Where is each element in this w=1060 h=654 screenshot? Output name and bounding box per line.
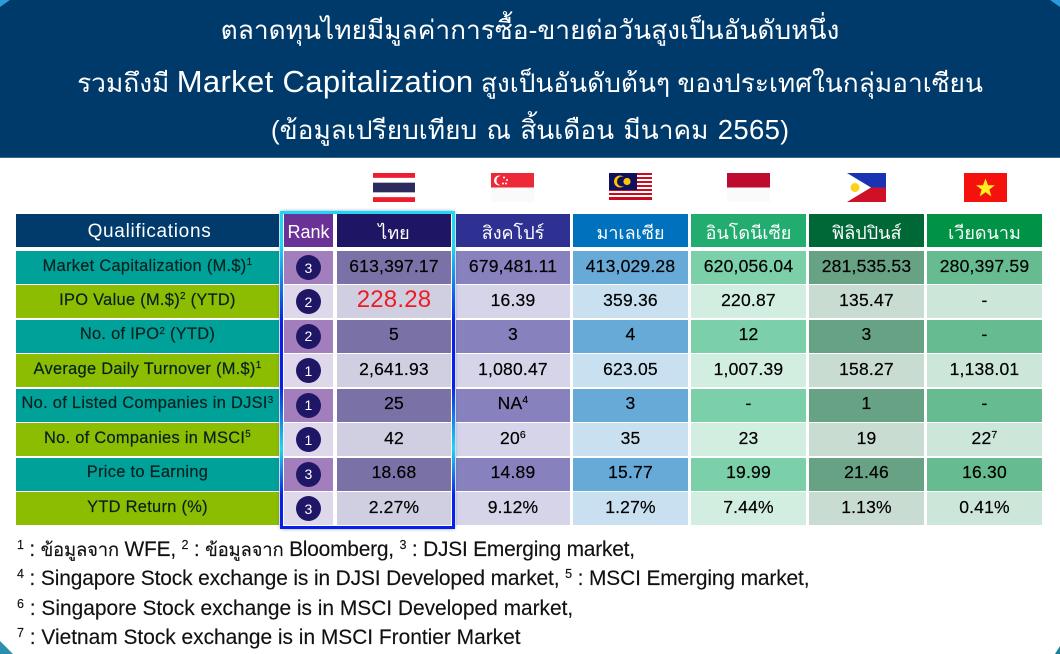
- row: No. of IPO: 2: [304, 328, 312, 344]
- row: No. of IPO: 3: [862, 324, 871, 344]
- row: IPO Value: 228.28: [357, 286, 431, 313]
- row: No. of Companies in MSCI: No. of Companies in MSCI5: [44, 428, 251, 446]
- header: Thailand: ไทย: [378, 222, 410, 242]
- row: Price to Earning: 14.89: [491, 462, 535, 482]
- row: Market Capitalization: 620,056.04: [704, 256, 793, 276]
- row: No. of Listed Companies in DJSI: NA4: [498, 393, 528, 413]
- header: Vietnam: เวียดนาม: [948, 222, 1021, 242]
- row: YTD Return: YTD Return (%): [87, 498, 208, 516]
- row: YTD Return: 2.27%: [369, 496, 419, 516]
- row: No. of Listed Companies in DJSI: -: [745, 393, 752, 413]
- row: YTD Return: 1.13%: [841, 496, 892, 516]
- row: Market Capitalization: 3: [304, 260, 312, 276]
- header: Singapore: สิงคโปร์: [482, 222, 544, 242]
- header: Qualifications: Qualifications: [88, 221, 211, 242]
- row: No. of IPO: -: [981, 324, 988, 344]
- row: Average Daily Turnover: 1,138.01: [950, 358, 1019, 378]
- row: No. of IPO: [16, 320, 1042, 353]
- row: No. of Companies in MSCI: 19: [857, 428, 876, 448]
- row: IPO Value: -: [981, 290, 988, 310]
- header: Singapore: [456, 214, 570, 247]
- row: IPO Value: 16.39: [491, 290, 535, 310]
- flag: Indonesia: [727, 173, 770, 188]
- footnote line 2: 4 : Singapore Stock exchange is in DJSI Developed market, 5 : MSCI Emerging market,: [17, 567, 809, 590]
- row: No. of Companies in MSCI: 23: [739, 428, 758, 448]
- row: YTD Return: 7.44%: [723, 496, 774, 516]
- row: No. of Listed Companies in DJSI: 1: [862, 393, 871, 413]
- row: Average Daily Turnover: 1,080.47: [478, 358, 548, 378]
- row: No. of Listed Companies in DJSI: -: [981, 393, 988, 413]
- row: No. of Companies in MSCI: 206: [500, 428, 526, 448]
- corner accent: bottom left: [0, 641, 13, 654]
- row: YTD Return: 1.27%: [605, 496, 656, 516]
- row: IPO Value: 220.87: [721, 290, 776, 310]
- row: IPO Value: 135.47: [839, 290, 894, 310]
- header: Rank: [284, 214, 333, 247]
- row: Market Capitalization: 280,397.59: [940, 256, 1029, 276]
- row: No. of Companies in MSCI: 42: [384, 428, 404, 448]
- row: No. of Listed Companies in DJSI: 1: [304, 397, 312, 413]
- row: Average Daily Turnover: Average Daily Turnover (M.$)1: [34, 360, 261, 378]
- row: No. of IPO: No. of IPO2 (YTD): [80, 325, 215, 343]
- row: Price to Earning: 16.30: [962, 462, 1007, 482]
- row: Market Capitalization: 613,397.17: [349, 256, 439, 276]
- row: Average Daily Turnover: 623.05: [603, 358, 658, 378]
- row: Price to Earning: 15.77: [608, 462, 653, 482]
- row: YTD Return: 9.12%: [488, 496, 538, 516]
- row: IPO Value: [16, 285, 1042, 318]
- flag: Vietnam: [964, 173, 1007, 202]
- row: Price to Earning: Price to Earning: [87, 463, 208, 481]
- title banner: [0, 0, 1060, 158]
- row: Average Daily Turnover: 2,641.93: [359, 358, 429, 378]
- row: Market Capitalization: Market Capitalization (M.$)1: [43, 256, 252, 274]
- row: Market Capitalization: [16, 251, 1042, 284]
- footnote line 3: 6 : Singapore Stock exchange is in MSCI Developed market,: [17, 597, 573, 620]
- row: Market Capitalization: 413,029.28: [586, 256, 675, 276]
- flag: Singapore: [491, 173, 534, 188]
- header: Qualifications: [16, 214, 279, 247]
- header: Thailand: [337, 214, 451, 247]
- header: Vietnam: [927, 214, 1042, 247]
- row: No. of IPO: 3: [508, 324, 518, 344]
- footnote line 4: 7 : Vietnam Stock exchange is in MSCI Frontier Market: [17, 626, 521, 649]
- title line 2: รวมถึงมี Market Capitalization สูงเป็นอันดับต้นๆ ของประเทศในกลุ่มอาเซียน: [77, 64, 983, 99]
- row: No. of Listed Companies in DJSI: [16, 389, 1042, 422]
- title line 3: (ข้อมูลเปรียบเทียบ ณ สิ้นเดือน มีนาคม 2565): [271, 114, 789, 145]
- title line 1: ตลาดทุนไทยมีมูลค่าการซื้อ-ขายต่อวันสูงเป็นอันดับหนึ่ง: [221, 15, 839, 45]
- footnote line 1: 1 : ข้อมูลจาก WFE, 2 : ข้อมูลจาก Bloomberg, 3 : DJSI Emerging market,: [17, 538, 635, 561]
- corner accent: bottom right: [1055, 646, 1060, 654]
- row: No. of Companies in MSCI: [16, 423, 1042, 456]
- header: Malaysia: [573, 214, 688, 247]
- row: Price to Earning: [16, 458, 1042, 491]
- row: No. of Companies in MSCI: 35: [621, 428, 640, 448]
- row: No. of Listed Companies in DJSI: No. of Listed Companies in DJSI3: [22, 394, 273, 412]
- row: Market Capitalization: 679,481.11: [469, 256, 557, 276]
- row: No. of Companies in MSCI: 227: [972, 428, 997, 448]
- header: Indonesia: [691, 214, 806, 247]
- row: Price to Earning: 3: [304, 466, 312, 482]
- row: No. of IPO: 12: [739, 324, 758, 344]
- header: Malaysia: มาเลเซีย: [596, 222, 665, 242]
- row: Price to Earning: 19.99: [726, 462, 771, 482]
- row: Price to Earning: 21.46: [844, 462, 889, 482]
- row: Price to Earning: 18.68: [372, 462, 416, 482]
- row: IPO Value: 359.36: [603, 290, 658, 310]
- flag: Philippines: [847, 173, 886, 202]
- row: YTD Return: [16, 492, 1042, 525]
- corner accent: top right: [1050, 0, 1060, 7]
- row: IPO Value: 2: [304, 294, 312, 310]
- header: Rank: Rank: [287, 222, 330, 242]
- table header row: [16, 214, 1042, 247]
- row: Average Daily Turnover: 1: [304, 362, 312, 378]
- row: Average Daily Turnover: 158.27: [839, 358, 894, 378]
- header: Philippines: ฟิลิปปินส์: [832, 222, 901, 242]
- corner accent: top left: [0, 0, 10, 7]
- header: Philippines: [809, 214, 924, 247]
- row: No. of IPO: 4: [626, 324, 635, 344]
- row: Market Capitalization: 281,535.53: [822, 256, 911, 276]
- row: YTD Return: 0.41%: [959, 496, 1010, 516]
- flag: Malaysia: [609, 173, 652, 200]
- row: No. of Companies in MSCI: 1: [304, 432, 312, 448]
- header: Indonesia: อินโดนีเซีย: [706, 222, 791, 242]
- row: IPO Value: IPO Value (M.$)2 (YTD): [59, 290, 236, 308]
- row: Average Daily Turnover: [16, 354, 1042, 387]
- row: No. of Listed Companies in DJSI: 3: [626, 393, 635, 413]
- row: No. of IPO: 5: [389, 324, 399, 344]
- footnotes: [17, 538, 809, 649]
- row: No. of Listed Companies in DJSI: 25: [384, 393, 404, 413]
- row: Average Daily Turnover: 1,007.39: [714, 358, 783, 378]
- flag: Thailand: [373, 173, 415, 202]
- highlight frame around Thailand column: [280, 211, 455, 529]
- row: YTD Return: 3: [304, 500, 312, 516]
